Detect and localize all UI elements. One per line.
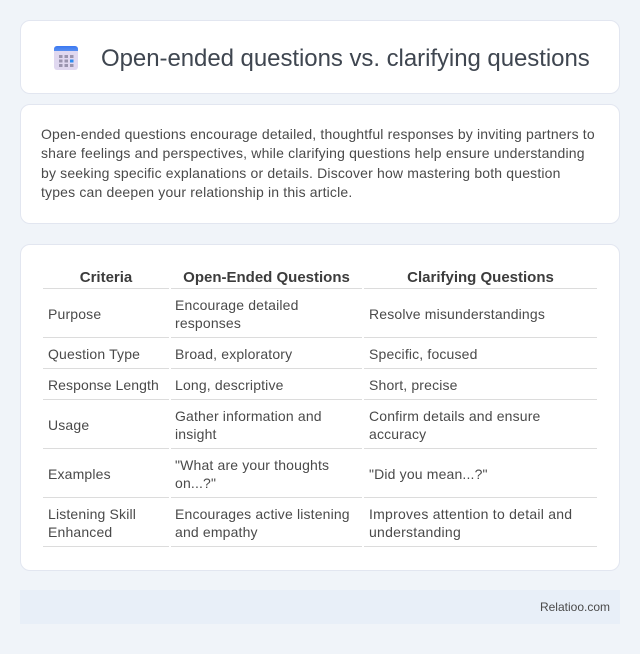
intro text bbox=[41, 126, 595, 200]
row: listening skill enhanced: Listening Skill bbox=[48, 506, 136, 522]
intro text: types can deepen your relationship in this article. bbox=[41, 184, 352, 200]
row: examples: on...?" bbox=[175, 475, 216, 491]
row: response length: Short, precise bbox=[369, 377, 458, 393]
row: question type: Question Type bbox=[48, 346, 140, 362]
row: question type: Specific, focused bbox=[369, 346, 478, 362]
row: listening skill enhanced: Improves attention to detail and bbox=[369, 506, 572, 522]
row: examples: "Did you mean...?" bbox=[369, 466, 488, 482]
row: usage: Usage bbox=[48, 417, 89, 433]
row: usage: accuracy bbox=[369, 426, 426, 442]
icon: calendar bbox=[54, 46, 78, 70]
row: listening skill enhanced bbox=[48, 506, 572, 540]
row: listening skill enhanced: Encourages active listening bbox=[175, 506, 350, 522]
row: listening skill enhanced: Enhanced bbox=[48, 524, 112, 540]
row: question type bbox=[48, 346, 478, 362]
intro text: Open-ended questions encourage detailed, thoughtful responses by inviting partners to bbox=[41, 126, 595, 142]
row: question type: Broad, exploratory bbox=[175, 346, 292, 362]
row: examples: "What are your thoughts bbox=[175, 457, 329, 473]
row: listening skill enhanced: understanding bbox=[369, 524, 461, 540]
row: purpose: Purpose bbox=[48, 306, 101, 322]
intro text: by seeking specific explanations or details. Discover how mastering both question bbox=[41, 165, 561, 181]
panel: introduction bbox=[20, 104, 620, 224]
row: purpose: responses bbox=[175, 315, 241, 331]
row: examples: Examples bbox=[48, 466, 111, 482]
row: usage: Gather information and bbox=[175, 408, 322, 424]
row: listening skill enhanced: and empathy bbox=[175, 524, 258, 540]
row: response length: Long, descriptive bbox=[175, 377, 284, 393]
comparison table bbox=[43, 269, 597, 547]
panel: title card bbox=[20, 20, 620, 94]
row: response length bbox=[48, 377, 458, 393]
row: purpose: Resolve misunderstandings bbox=[369, 306, 545, 322]
table header bbox=[80, 269, 554, 286]
table header: Clarifying Questions bbox=[407, 269, 554, 286]
intro text: share feelings and perspectives, while clarifying questions help ensure understanding bbox=[41, 145, 585, 161]
row: usage: Confirm details and ensure bbox=[369, 408, 540, 424]
row: usage: insight bbox=[175, 426, 217, 442]
row: purpose: Encourage detailed bbox=[175, 297, 299, 313]
row: purpose bbox=[48, 297, 545, 331]
title: Open-ended questions vs. clarifying questions bbox=[101, 45, 590, 72]
table header: Criteria bbox=[80, 269, 132, 286]
panel: comparison table bbox=[20, 244, 620, 571]
row: examples bbox=[48, 457, 488, 491]
footer credit: Relatioo.com bbox=[540, 600, 610, 614]
footer bar bbox=[20, 590, 620, 624]
table header: Open-Ended Questions bbox=[183, 269, 350, 286]
row: usage bbox=[48, 408, 540, 442]
row: response length: Response Length bbox=[48, 377, 159, 393]
